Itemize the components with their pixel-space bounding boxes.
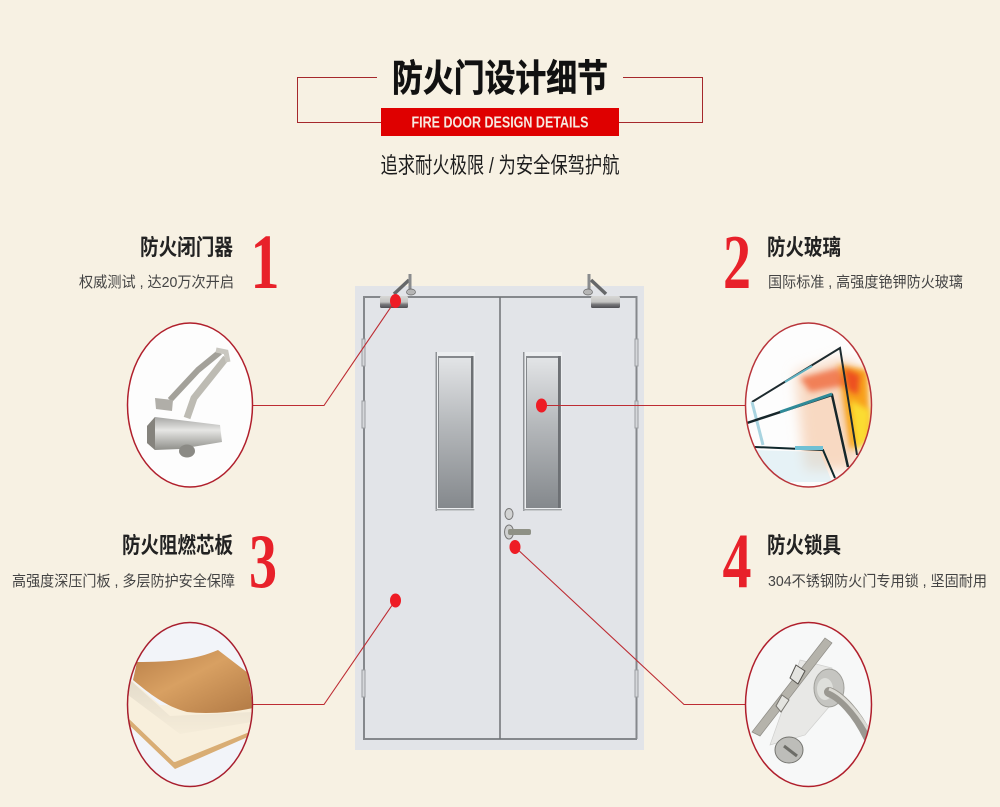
lock cylinder (505, 508, 513, 520)
feature 3 text (12, 518, 277, 604)
number 4: 4 (723, 516, 751, 604)
glass pane back (752, 348, 857, 455)
flames (795, 358, 868, 470)
glass pane front (755, 447, 835, 478)
left window (436, 352, 475, 511)
lever (829, 692, 868, 737)
number 1: 1 (251, 217, 279, 305)
heading 1: 防火闭门器 (140, 235, 233, 260)
number 2: 2 (723, 219, 751, 305)
circle: door closer (128, 323, 252, 487)
heading 3: 防火阻燃芯板 (122, 533, 233, 558)
latch (790, 665, 805, 684)
door slab (355, 286, 644, 750)
feature 2 text (723, 219, 963, 305)
face plate (752, 638, 832, 736)
circle: fire lock (746, 622, 872, 786)
hinges (362, 339, 638, 697)
fire door (355, 274, 644, 750)
description 3: 高强度深压门板 , 多层防护安全保障 (12, 572, 235, 590)
glass pane mid (747, 395, 848, 467)
subtitle: 追求耐火极限 / 为安全保驾护航 (380, 154, 620, 178)
door closer left (380, 274, 416, 308)
door centre seam (499, 297, 501, 739)
core layers (126, 678, 252, 762)
title frame lines (298, 78, 702, 122)
arm bracket (155, 398, 173, 411)
heading 4: 防火锁具 (767, 533, 841, 558)
closer arm (170, 352, 220, 400)
door frame lines (363, 297, 637, 739)
description 4: 304不锈钢防火门专用锁 , 坚固耐用 (768, 573, 987, 590)
header (298, 58, 702, 178)
feature 4 text (723, 516, 987, 604)
thumb turn (775, 737, 803, 763)
circle: fire glass (746, 323, 872, 487)
callout dots (390, 294, 547, 608)
title: 防火门设计细节 (392, 58, 608, 100)
lock body (770, 660, 835, 745)
heading 2: 防火玻璃 (767, 235, 841, 260)
description 1: 权威测试 , 达20万次开启 (79, 274, 234, 291)
number 3: 3 (249, 518, 277, 604)
red banner: FIRE DOOR DESIGN DETAILS (412, 114, 588, 132)
description 2: 国际标准 , 高强度铯钾防火玻璃 (768, 274, 963, 291)
door handle (504, 525, 531, 539)
red banner (381, 108, 619, 136)
door closer right (584, 274, 620, 308)
callout lines (253, 301, 745, 704)
feature 1 text (79, 217, 279, 305)
closer body (147, 417, 222, 450)
top sheet (133, 650, 253, 713)
bottom board edge (126, 716, 250, 769)
right window (523, 352, 562, 511)
circle: fireproof core board (126, 622, 253, 786)
handle rose (814, 669, 844, 707)
